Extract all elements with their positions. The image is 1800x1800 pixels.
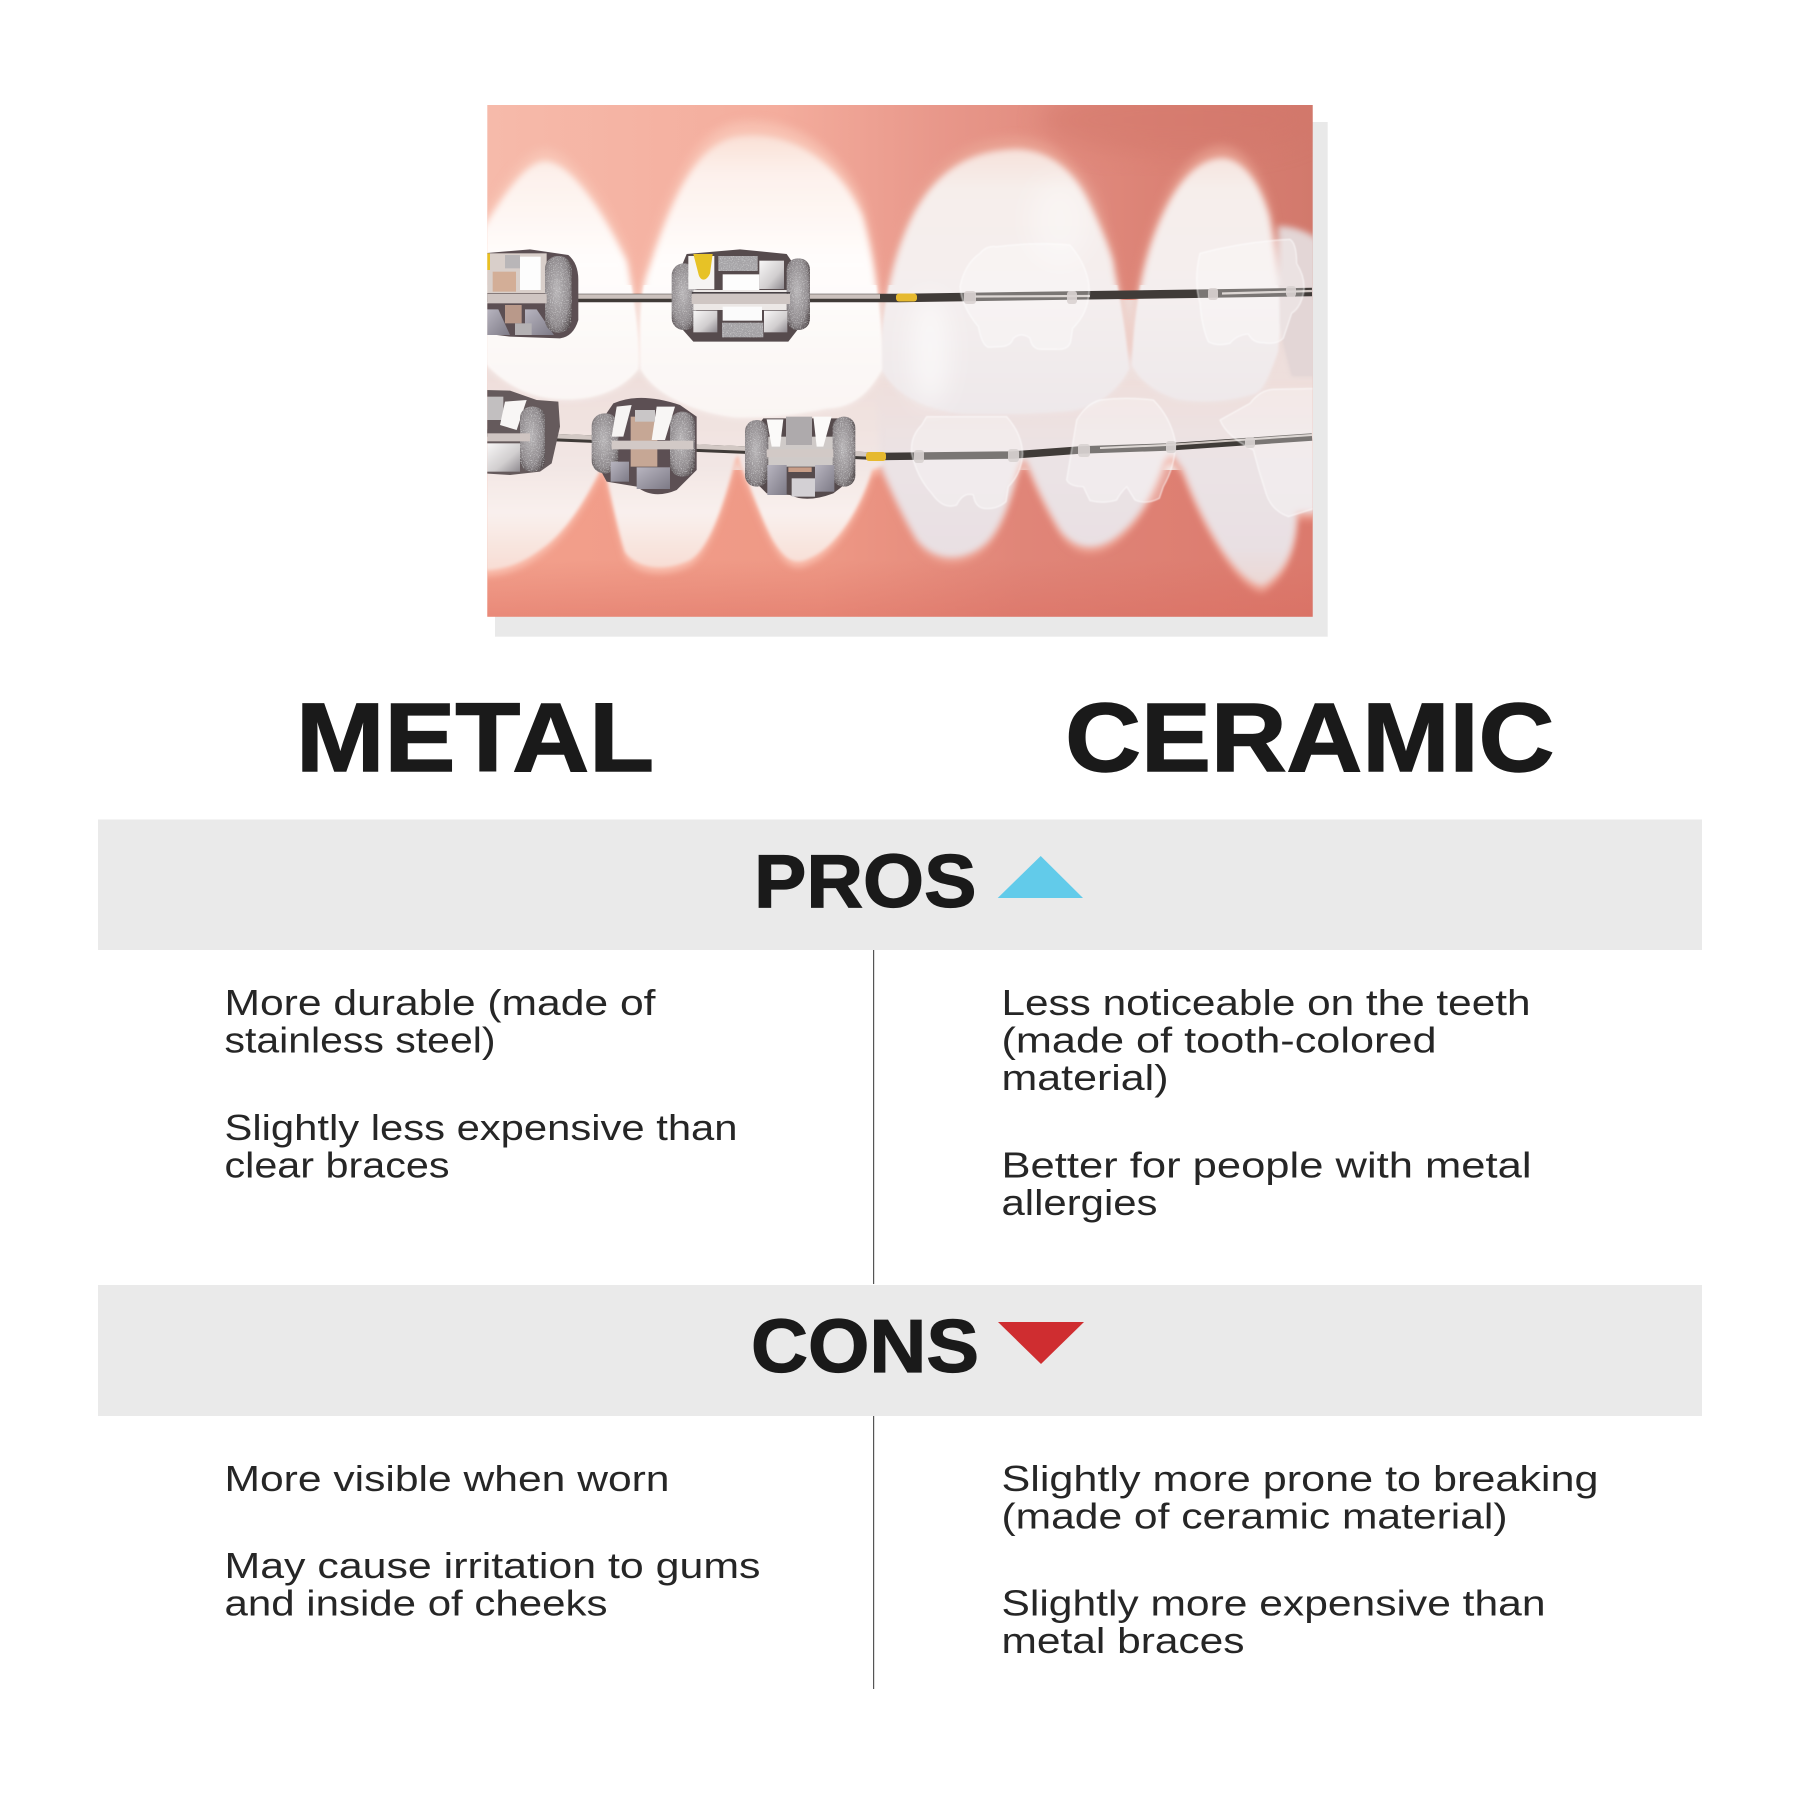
heading: METAL: METAL <box>296 683 654 792</box>
text block: ceramic pros: Better for people with metal <box>1002 1144 1532 1186</box>
ceramic bracket tie points on wires <box>914 286 1296 463</box>
photo: metal and ceramic braces on teeth <box>470 85 1330 637</box>
text block: metal pros: Slightly less expensive than <box>224 1107 738 1148</box>
divider: cons columns <box>873 1416 874 1689</box>
bracket: ceramic upper fourth <box>1197 239 1304 345</box>
bracket: ceramic upper third <box>960 244 1089 349</box>
bracket: ceramic lower sixth <box>1220 388 1320 517</box>
text block: ceramic pros: (made of tooth-colored <box>1002 1020 1436 1060</box>
lower teeth <box>487 454 1313 594</box>
panel: cons banner <box>98 1285 1702 1416</box>
text block: metal pros: clear braces <box>224 1144 450 1186</box>
text block: ceramic pros: material) <box>1002 1057 1168 1098</box>
heading: CERAMIC: CERAMIC <box>1065 683 1554 792</box>
text block: ceramic cons: metal braces <box>1002 1620 1244 1661</box>
text block: ceramic pros <box>1002 982 1532 1223</box>
ceramic brackets <box>911 239 1320 517</box>
wire upper <box>487 291 1312 298</box>
wire lower <box>487 432 1312 456</box>
bracket: lower third <box>745 417 855 499</box>
panel: pros banner <box>98 820 1702 950</box>
text block: ceramic cons: (made of ceramic material) <box>1002 1496 1508 1536</box>
bracket: lower far left <box>483 390 560 475</box>
text block: ceramic cons: Slightly more prone to breaking <box>1002 1458 1598 1499</box>
text block: ceramic cons <box>1002 1458 1598 1661</box>
bracket: ceramic lower fifth <box>1067 398 1175 502</box>
text block: ceramic pros: allergies <box>1002 1182 1158 1223</box>
text block: metal cons: More visible when worn <box>224 1458 670 1499</box>
upper teeth soft crowns <box>487 133 1313 386</box>
icon: down triangle <box>998 1322 1084 1364</box>
bracket: upper far left <box>483 249 578 338</box>
tooth highlights <box>920 182 1098 386</box>
upper teeth crisp edges <box>487 285 1278 388</box>
yellow ligature marks on wire <box>866 294 917 461</box>
text block: metal cons <box>224 1458 760 1624</box>
metal brackets <box>483 249 855 499</box>
photo shadow <box>495 122 1328 637</box>
divider: pros columns <box>873 950 874 1284</box>
heading: PROS: PROS <box>754 839 976 923</box>
text block: ceramic pros: Less noticeable on the teeth <box>1002 982 1530 1023</box>
icon: up triangle <box>998 856 1083 898</box>
bracket: ceramic lower fourth <box>911 417 1023 509</box>
text block: metal cons: May cause irritation to gums <box>224 1545 760 1586</box>
text block: metal pros: More durable (made of <box>224 982 657 1023</box>
bracket: lower second <box>592 398 697 494</box>
gum tissue <box>487 85 1320 617</box>
heading: CONS: CONS <box>751 1304 979 1388</box>
bracket: upper second <box>672 249 810 342</box>
gum highlights around teeth <box>487 120 881 327</box>
text block: metal pros: stainless steel) <box>224 1020 496 1060</box>
text block: ceramic cons: Slightly more expensive than <box>1002 1582 1546 1624</box>
text block: metal pros <box>224 982 738 1186</box>
text block: metal cons: and inside of cheeks <box>224 1582 608 1624</box>
